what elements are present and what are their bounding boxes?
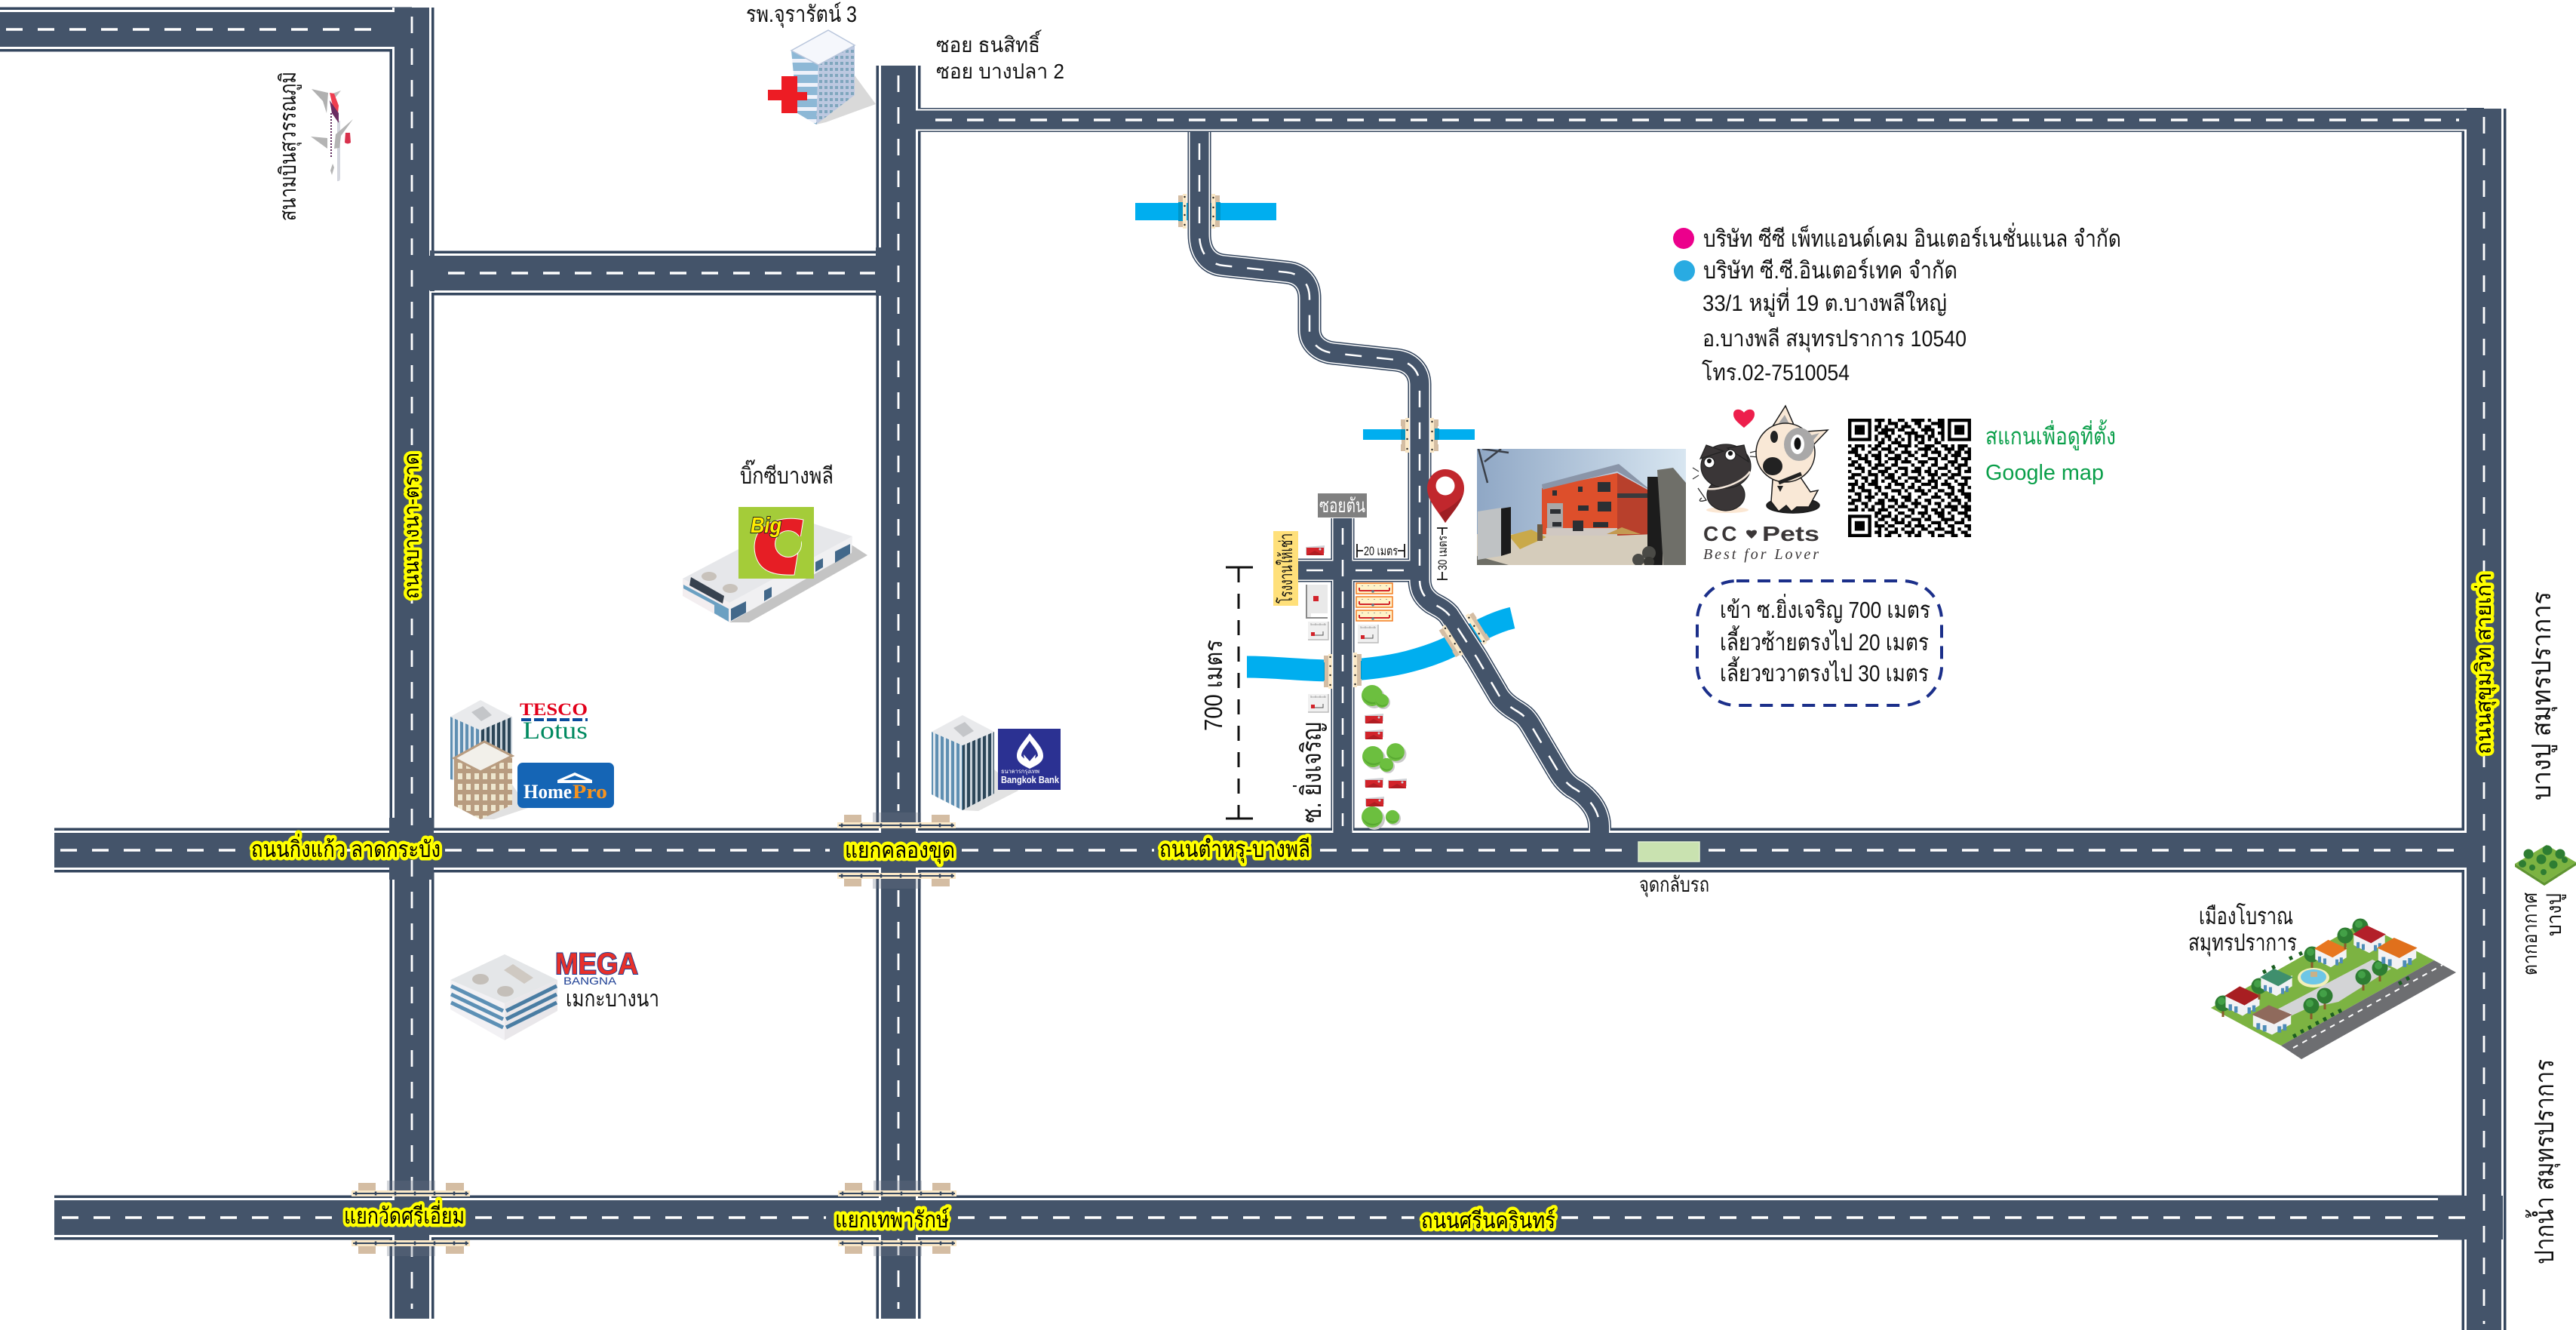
- river: curved canal: [1247, 618, 1512, 671]
- label: Khlong Khut intersection: แยกคลองขุด: [845, 838, 955, 865]
- logo text: CC Pets: CC: [1703, 522, 1739, 545]
- icon: hospital building: [768, 30, 876, 124]
- bullet: blue: [1674, 260, 1695, 281]
- sign: factory for rent: [1273, 531, 1298, 606]
- logo: HomePro: [517, 763, 614, 808]
- canal bridges: [1178, 194, 1491, 689]
- dimension: 700 metres: [1199, 567, 1253, 819]
- callout: directions: เข้า ซ.ยิ่งเจริญ 700 เมตร: [1720, 594, 1930, 623]
- dimension: 30 metres: 30 เมตร: [1435, 536, 1450, 570]
- label: Big C Bang Phli: บิ๊กซีบางพลี: [740, 459, 834, 489]
- sign: factory for rent: โรงงานให้เช่า: [1276, 533, 1297, 604]
- bridge: Thepharak top: [838, 1181, 956, 1196]
- bridge: Wat Si Iam top: [352, 1181, 470, 1196]
- label: Bang Pu resort: บางปู: [2543, 893, 2566, 936]
- label: Thepharak intersection: แยกเทพารักษ์: [835, 1207, 949, 1233]
- logo: HomePro: Pro: [573, 781, 607, 803]
- company details: [1673, 223, 2121, 385]
- bullet: pink: [1673, 228, 1694, 249]
- logo text: CC Pets: [1703, 522, 1819, 545]
- logo: Bangkok Bank: [998, 729, 1061, 790]
- callout: directions: [1697, 581, 1942, 705]
- label: Tamru-Bang Phli road: ถนนตำหรุ-บางพลี: [1159, 836, 1310, 864]
- river: upper canal: [1135, 203, 1276, 220]
- label: Ancient City: [2188, 903, 2297, 957]
- label: Bang Pu resort: [2519, 892, 2566, 975]
- river: middle canal: [1363, 429, 1475, 440]
- callout: directions: เลี้ยวขวาตรงไป 30 เมตร: [1720, 656, 1929, 687]
- icon: location pin: [1427, 469, 1464, 523]
- logo: Bangkok Bank: Bangkok Bank: [1001, 774, 1060, 785]
- icon: dog: [1756, 406, 1828, 513]
- label: Wat Si Iam intersection: แยกวัดศรีเอี่ยม: [344, 1200, 465, 1229]
- dimension: 20 metres: 20 เมตร: [1364, 544, 1398, 558]
- logo: Tesco Lotus: Lotus: [523, 717, 588, 745]
- icon: heart: [1733, 410, 1755, 428]
- label: Soi Thanasit / Soi Bang Pla 2: ซอย ธนสิทธิ์: [936, 29, 1042, 57]
- logo: Bangkok Bank: ธนาคารกรุงเทพ: [1001, 768, 1039, 775]
- bridge: Wat Si Iam bottom: [352, 1240, 470, 1256]
- label: Suvarnabhumi airport: สนามบินสุวรรณภูมิ: [276, 72, 302, 221]
- QR code: [1848, 420, 1971, 536]
- label: Soi Thanasit / Soi Bang Pla 2: ซอย บางปลา 2: [936, 60, 1064, 83]
- label: Chularat 3 hospital: รพ.จุรารัตน์ 3: [746, 2, 857, 29]
- label: Bangna-Trat road: ถนนบางนา-ตราด: [400, 453, 423, 599]
- logo: Mega Bangna: MEGA: [555, 948, 638, 981]
- label: u-turn: จุดกลับรถ: [1639, 873, 1709, 898]
- icon: Tesco Lotus tower: [450, 700, 512, 785]
- photo: company building: [1477, 449, 1686, 565]
- logo: HomePro: Home: [523, 781, 572, 803]
- icon: airplane: [311, 89, 353, 181]
- icon: HomePro building: [454, 742, 528, 819]
- company name 1: บริษัท ซีซี เพ็ทแอนด์เคม อินเตอร์เนชั่นแนล จำกัด: [1703, 223, 2121, 252]
- bridge: Khlong Khut bottom: [837, 873, 956, 889]
- logo: Tesco Lotus: TESCO: [520, 700, 588, 719]
- QR caption: [1985, 419, 2116, 485]
- address line 2: อ.บางพลี สมุทรปราการ 10540: [1702, 327, 1967, 353]
- logo tagline: Best for Lover: [1703, 546, 1819, 563]
- logo: CC Pets: [1693, 406, 1828, 563]
- label: Kanchanaphisek / Kingkaew road: ถนนกิ่งแก้ว ลาดกระบัง: [251, 834, 441, 862]
- label: Ancient City: สมุทรปราการ: [2188, 929, 2297, 957]
- QR caption: สแกนเพื่อดูที่ตั้ง: [1985, 419, 2116, 450]
- bridge: Thepharak bottom: [838, 1240, 956, 1256]
- logo: Mega Bangna: BANGNA: [563, 975, 617, 987]
- label: Bang Pu Samut Prakan: บางปู สมุทรปราการ: [2527, 591, 2557, 800]
- label: Ancient City: เมืองโบราณ: [2199, 903, 2293, 929]
- sign: dead end: ซอยตัน: [1319, 494, 1365, 517]
- junction fills: [389, 247, 2503, 1239]
- callout: directions: เลี้ยวซ้ายตรงไป 20 เมตร: [1720, 625, 1929, 656]
- bridge: Khlong Khut top: [837, 812, 956, 828]
- dimension: 700 metres: 700 เมตร: [1199, 640, 1227, 731]
- illustration: Ancient City village: [2211, 919, 2456, 1059]
- label: Soi Thanasit / Soi Bang Pla 2: [936, 29, 1064, 83]
- icon: Bangkok Bank tower: [932, 715, 1018, 811]
- logo: Tesco Lotus: [520, 700, 588, 745]
- icon: cat: [1693, 444, 1759, 513]
- label: Srinagarindra road: ถนนศรีนครินทร์: [1421, 1208, 1555, 1233]
- label: Pak Nam Samut Prakan: ปากน้ำ สมุทรปราการ: [2525, 1059, 2560, 1264]
- icon: Big C building: Big: [751, 514, 781, 538]
- label: Soi Ying Charoen: ซ. ยิ่งเจริญ: [1293, 722, 1327, 823]
- telephone: โทร.02-7510054: [1702, 359, 1850, 385]
- company name 2: บริษัท ซี.ซี.อินเตอร์เทค จำกัด: [1703, 257, 1957, 284]
- label: Bang Pu resort: ตากอากาศ: [2519, 892, 2541, 975]
- roadside houses and buildings: [1306, 545, 1407, 830]
- QR caption: Google map: [1985, 461, 2104, 485]
- icon: Mega Bangna mall: [450, 954, 557, 1040]
- icon: Bang Pu resort trees: [2515, 845, 2576, 886]
- address line 1: 33/1 หมู่ที่ 19 ต.บางพลีใหญ่: [1702, 287, 1947, 317]
- u-turn point: [1638, 842, 1699, 862]
- label: Mega Bangna: เมกะบางนา: [566, 987, 659, 1012]
- icon: Big C building: [683, 507, 867, 622]
- logo text: CC Pets: Pets: [1762, 522, 1819, 545]
- label: Sukhumvit old road: ถนนสุขุมวิท สายเก่า: [2472, 573, 2497, 754]
